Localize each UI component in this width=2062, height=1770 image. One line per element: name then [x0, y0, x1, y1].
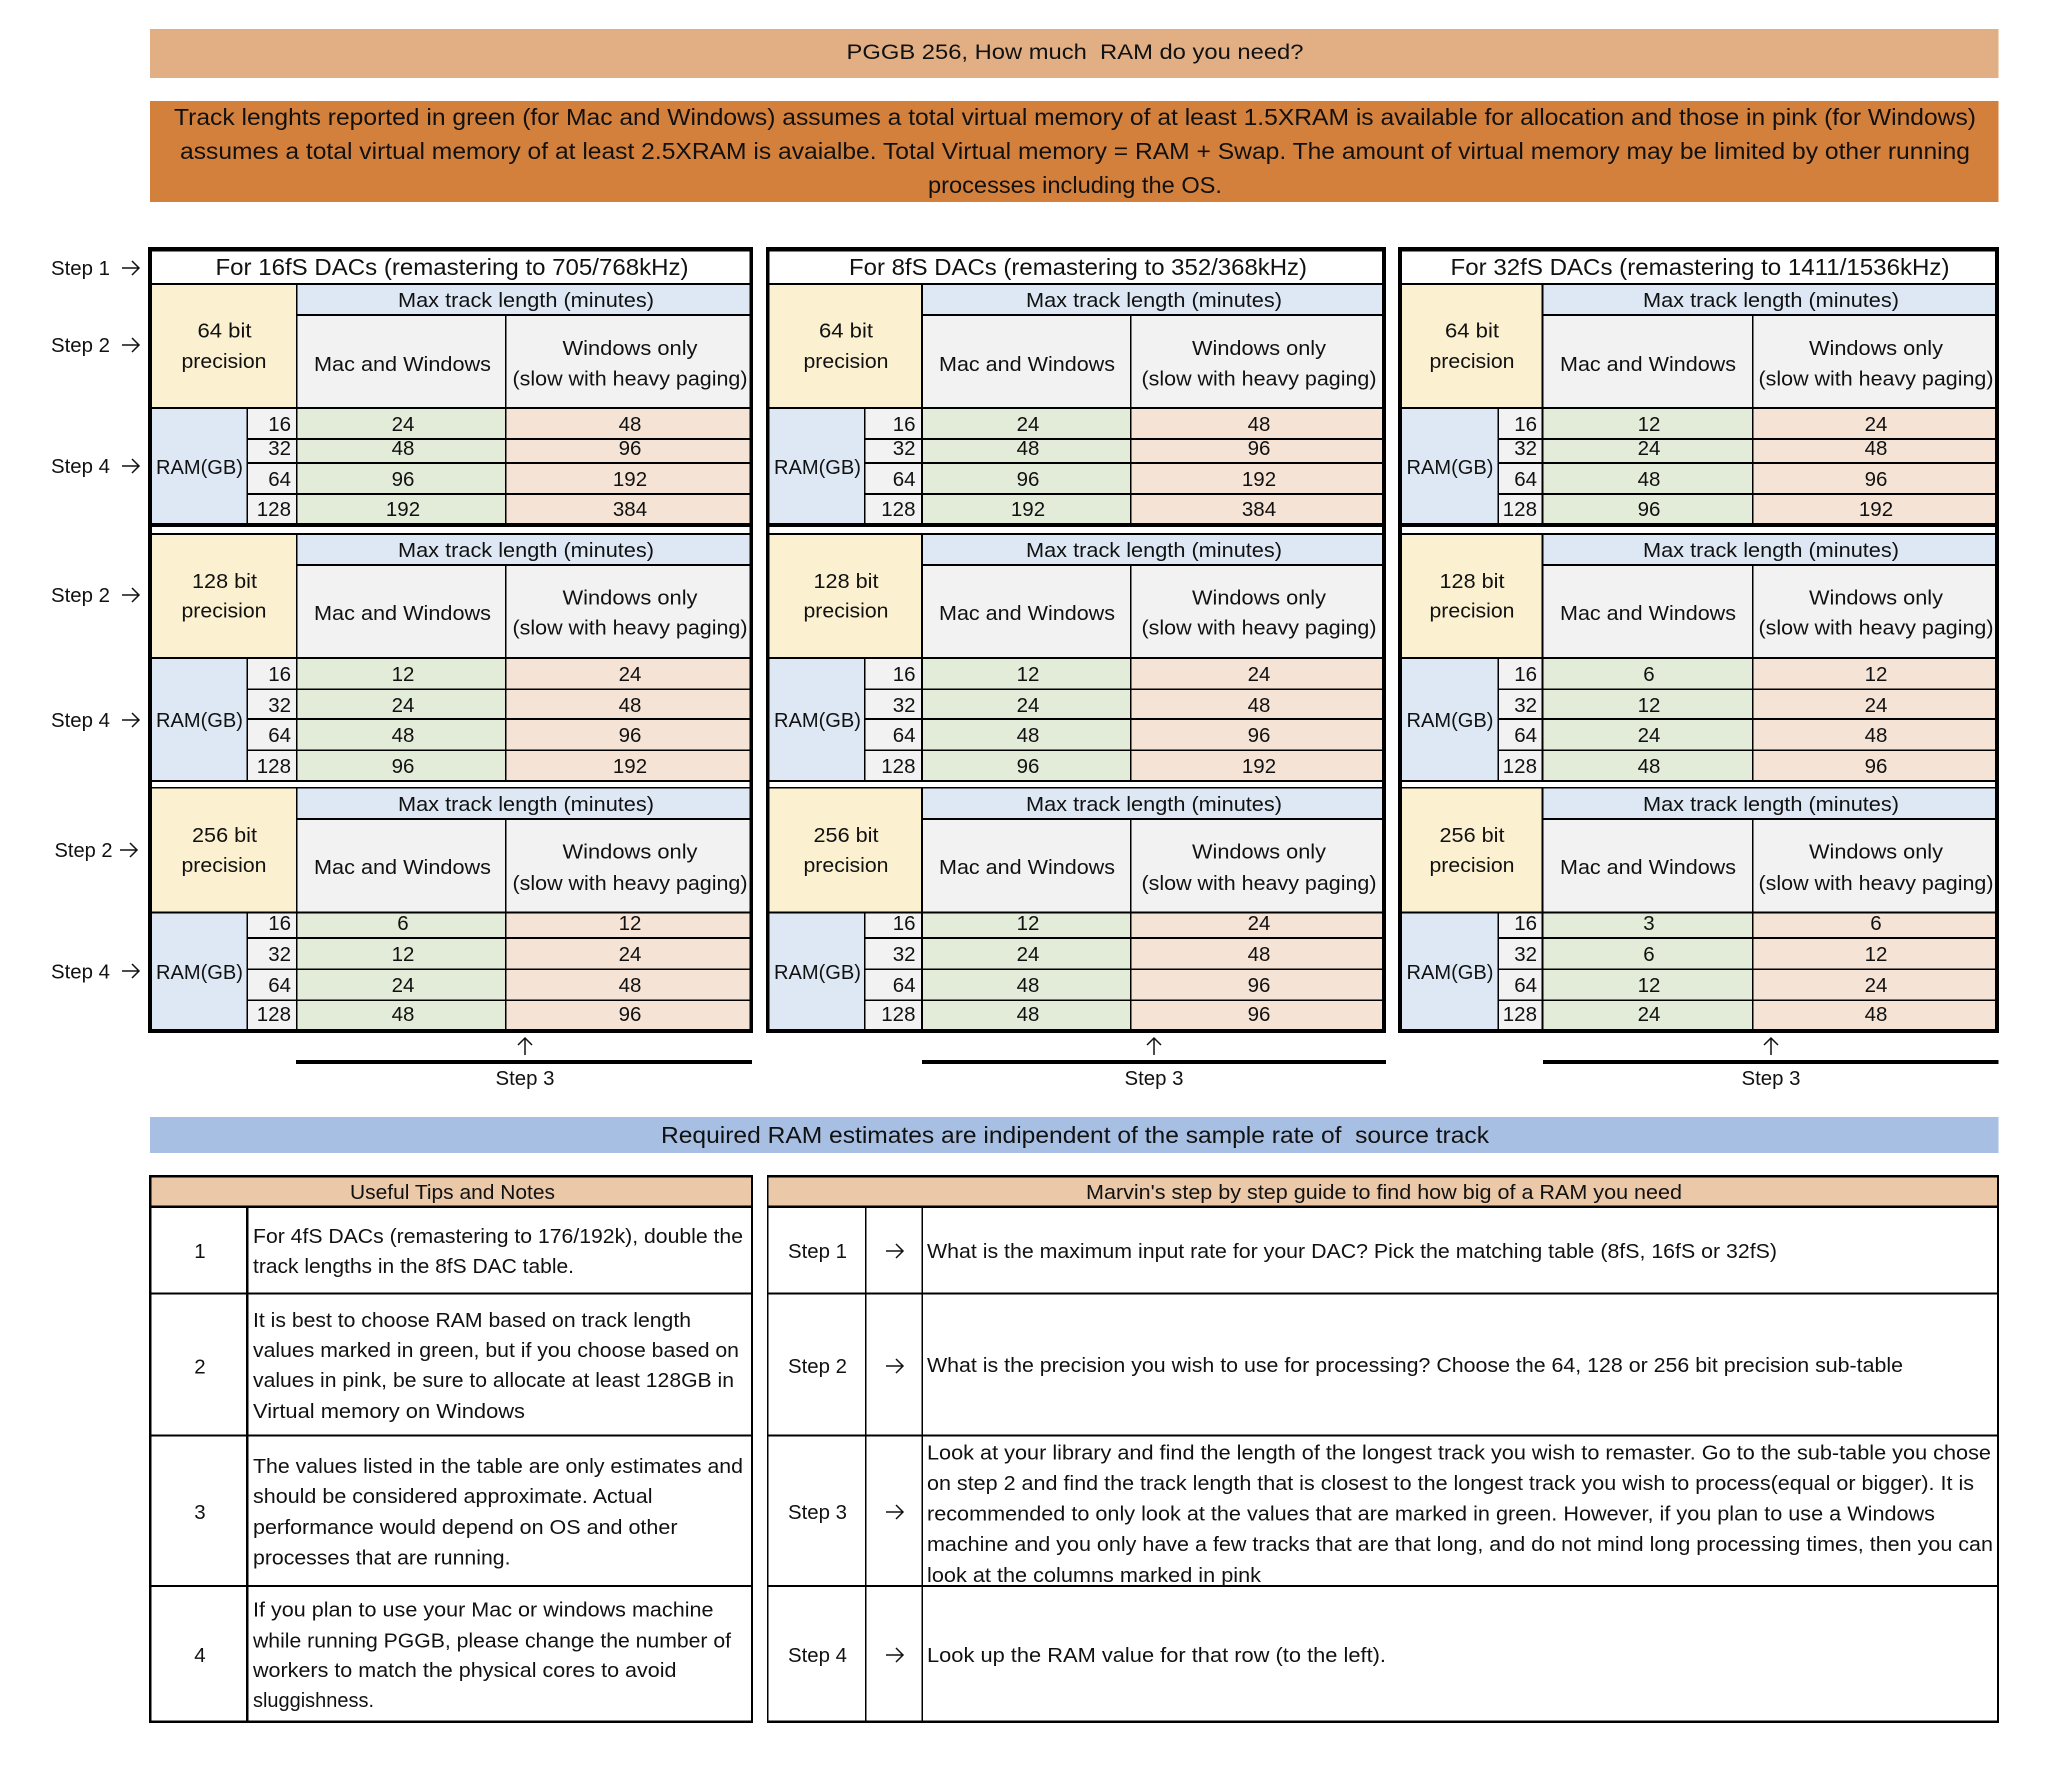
sub-table: 128 bit: 48	[619, 694, 641, 717]
sub-table: 128 bit: 16	[1514, 663, 1537, 686]
sub-table: 64 bit: 24	[1865, 413, 1887, 436]
sub-table: 128 bit: 32	[1514, 694, 1537, 717]
tip 1: track lengths in the 8fS DAC table.	[253, 1255, 574, 1278]
guide step 3: recommended to only look at the values that are marked in green. However, if you plan to use a Windows	[927, 1502, 1935, 1526]
sub-table: 256 bit: 24	[1638, 1003, 1660, 1026]
guide step 3	[768, 1436, 1997, 1587]
sub-table: 128 bit: 64	[268, 724, 291, 747]
sub-table: 128 bit: 24	[1638, 724, 1660, 747]
sub-table: 256 bit: 32	[893, 943, 916, 966]
sub-table: 128 bit: (slow with heavy paging)	[1142, 616, 1376, 640]
virtual memory note banner: assumes a total virtual memory of at least 2.5XRAM is avaialbe. Total Virtual memory = RAM + Swap. The amount of virtual memory may be limited by other running	[180, 138, 1970, 164]
sub-table: 64 bit: Max track length (minutes)	[398, 289, 654, 312]
sub-table: 256 bit: Max track length (minutes)	[398, 793, 654, 816]
sub-table: 128 bit: 16	[893, 663, 916, 686]
heading: 8fS: For 8fS DACs (remastering to 352/368kHz)	[849, 254, 1307, 280]
sub-table: 64 bit: (slow with heavy paging)	[512, 368, 748, 390]
step 3 marker: 8fS: Step 3	[1124, 1067, 1184, 1090]
sub-table: 64 bit: RAM(GB)	[774, 456, 861, 479]
sub-table: 256 bit: 12	[392, 943, 414, 966]
left step markers: Step 2	[54, 839, 112, 862]
sub-table: 256 bit: 6	[1643, 943, 1655, 966]
sub-table: 64 bit: precision	[1430, 350, 1514, 373]
sub-table: 128 bit: 128	[881, 755, 916, 778]
sub-table: 64 bit: 96	[619, 437, 641, 460]
panel: step by step guide	[767, 1175, 1999, 1723]
guide step 3: on step 2 and find the track length that is closest to the longest track you wish to process(equal or bigger). It is	[927, 1472, 1974, 1495]
sub-table: 256 bit: 256 bit	[192, 824, 257, 847]
sub-table: 256 bit: 96	[1248, 1003, 1270, 1026]
sub-table: 64 bit: 192	[1242, 468, 1276, 491]
sub-table: 64 bit: 64	[268, 468, 291, 491]
sub-table: 128 bit: Max track length (minutes)	[1026, 539, 1282, 562]
sub-table: 64 bit: 128	[1503, 498, 1537, 521]
sub-table: 64 bit: 48	[619, 413, 641, 436]
tip 2: Virtual memory on Windows	[253, 1400, 525, 1423]
tip 3: 3	[194, 1501, 206, 1524]
sub-table: 256 bit: 256 bit	[1440, 824, 1505, 847]
sub-table: 64 bit: Mac and Windows	[314, 353, 491, 376]
sub-table: 64 bit: RAM(GB)	[156, 456, 243, 479]
tip 4: sluggishness.	[253, 1689, 374, 1712]
sub-table: 256 bit: precision	[1430, 854, 1514, 877]
sub-table: 64 bit: precision	[182, 350, 266, 373]
sub-table: 128 bit: Max track length (minutes)	[398, 539, 654, 562]
sub-table: 256 bit: 96	[1248, 974, 1270, 997]
sub-table: 256 bit: 128	[881, 1003, 916, 1026]
left step markers: Step 4	[51, 960, 110, 984]
sub-table: 256 bit: 64	[893, 974, 916, 997]
sub-table: 64 bit: 64 bit	[198, 320, 252, 342]
sub-table: 64 bit: 24	[392, 413, 414, 436]
sub-table: 128 bit: 24	[619, 663, 641, 686]
sub-table: 256 bit: 48	[1017, 1003, 1039, 1026]
sub-table: 64 bit: 48	[392, 437, 414, 460]
panel: 8fS DAC table	[766, 247, 1386, 1033]
sub-table: 128 bit: 128 bit	[1440, 570, 1505, 593]
sub-table: 128 bit: 128	[257, 755, 291, 778]
panel: 32fS DAC table	[1398, 247, 1999, 1033]
heading: 16fS: For 16fS DACs (remastering to 705/768kHz)	[216, 254, 688, 280]
sub-table: 256 bit: 16	[893, 912, 916, 935]
guide step 4	[768, 1587, 1997, 1720]
sub-table: 256 bit: 128	[257, 1003, 291, 1026]
step 3 marker: 16fS	[296, 1038, 752, 1090]
tip 3: performance would depend on OS and other	[253, 1516, 678, 1539]
sub-table: 128 bit: precision	[182, 600, 266, 622]
sub-table: 128 bit: 48	[1638, 755, 1660, 778]
sub-table: 64 bit: 32	[268, 437, 291, 460]
tip 4: workers to match the physical cores to avoid	[252, 1659, 677, 1682]
sub-table: 128 bit: 12	[1865, 663, 1887, 686]
sub-table: 256 bit: 3	[1643, 912, 1655, 935]
sub-table: 64 bit: 24	[1017, 413, 1039, 436]
tip 3: The values listed in the table are only estimates and	[253, 1455, 743, 1478]
sub-table: 64 bit: Windows only	[1192, 337, 1327, 360]
sub-table: 256 bit: Mac and Windows	[939, 856, 1115, 879]
sub-table: 64 bit: 16	[893, 413, 916, 436]
sub-table: 128 bit: 24	[1865, 694, 1887, 717]
sub-table: 128 bit: 32	[268, 694, 291, 717]
sub-table: 128 bit: 12	[1638, 694, 1660, 717]
sub-table: 128 bit: 96	[1017, 755, 1039, 778]
step 3 marker: 32fS	[1543, 1038, 1998, 1090]
tip 2	[152, 1294, 751, 1434]
tip 3	[152, 1436, 751, 1585]
tip 4: If you plan to use your Mac or windows machine	[253, 1598, 714, 1622]
sub-table: 256 bit: 24	[392, 974, 414, 997]
sub-table: 256 bit: 6	[1870, 912, 1882, 935]
sub-table: 64 bit	[770, 285, 1382, 533]
sub-table: 128 bit: RAM(GB)	[774, 709, 861, 732]
sub-table: 256 bit: Max track length (minutes)	[1026, 793, 1282, 816]
sub-table: 256 bit: 16	[1514, 912, 1537, 935]
sub-table: 64 bit: 48	[1248, 413, 1270, 436]
sub-table: 256 bit	[1402, 788, 1995, 1029]
tip 4: while running PGGB, please change the number of	[252, 1630, 731, 1652]
tip 1	[152, 1208, 751, 1292]
sub-table: 128 bit	[1402, 535, 1995, 787]
sub-table: 128 bit: Max track length (minutes)	[1643, 539, 1899, 562]
sub-table: 64 bit: 192	[1859, 498, 1893, 521]
tip 1: For 4fS DACs (remastering to 176/192k), double the	[253, 1225, 743, 1248]
guide heading: Marvin's step by step guide to find how big of a RAM you need	[1086, 1181, 1682, 1204]
sub-table: 64 bit: 32	[1514, 437, 1537, 460]
sub-table: 128 bit: 96	[619, 724, 641, 747]
sub-table: 64 bit: Mac and Windows	[1560, 353, 1736, 376]
tip 4: 4	[194, 1644, 206, 1667]
sample rate note band: Required RAM estimates are indipendent of the sample rate of source track	[661, 1122, 1490, 1148]
sub-table: 64 bit: 64 bit	[1445, 320, 1499, 342]
sub-table: 64 bit: (slow with heavy paging)	[1142, 368, 1376, 390]
tips heading: Useful Tips and Notes	[350, 1181, 555, 1204]
sub-table: 256 bit: Windows only	[562, 840, 698, 864]
sub-table: 128 bit: 192	[613, 755, 647, 778]
virtual memory note banner: processes including the OS.	[928, 172, 1222, 198]
step 3 marker: 16fS: Step 3	[496, 1067, 554, 1090]
step 3 marker: 32fS: Step 3	[1742, 1067, 1800, 1090]
sub-table: 128 bit: Mac and Windows	[314, 602, 491, 625]
sub-table: 128 bit: (slow with heavy paging)	[512, 616, 748, 640]
sub-table: 256 bit: 64	[268, 974, 291, 997]
sub-table: 128 bit	[152, 535, 750, 787]
sub-table: 64 bit: 96	[1248, 437, 1270, 460]
left step markers: Step 2	[51, 584, 110, 607]
tip 2: values marked in green, but if you choose based on	[253, 1339, 739, 1362]
heading: 8fS	[770, 252, 1382, 283]
sub-table: 64 bit	[152, 285, 750, 533]
sub-table: 64 bit: 64	[1514, 468, 1537, 491]
heading: 16fS	[152, 252, 750, 283]
sub-table: 128 bit: 48	[392, 724, 414, 747]
guide step 2	[768, 1294, 1997, 1434]
sub-table: 64 bit: 12	[1638, 413, 1660, 436]
sub-table: 64 bit: (slow with heavy paging)	[1758, 368, 1994, 390]
heading: 32fS: For 32fS DACs (remastering to 1411/1536kHz)	[1450, 254, 1950, 280]
sub-table: 64 bit: 128	[881, 498, 916, 521]
sub-table: 64 bit: 96	[1638, 498, 1660, 521]
guide step 1: Step 1	[788, 1240, 847, 1263]
sub-table: 256 bit: (slow with heavy paging)	[1758, 872, 1994, 895]
sub-table: 64 bit: Max track length (minutes)	[1643, 289, 1899, 312]
sub-table: 64 bit: 48	[1638, 468, 1660, 491]
sub-table: 128 bit: Windows only	[562, 586, 698, 610]
sub-table: 128 bit: 16	[268, 663, 291, 686]
panel: 16fS DAC table	[148, 247, 753, 1033]
sub-table: 256 bit: 24	[1865, 974, 1887, 997]
sub-table: 128 bit: 24	[392, 694, 414, 717]
sub-table: 64 bit: 48	[1865, 437, 1887, 460]
sub-table: 256 bit: Max track length (minutes)	[1643, 793, 1899, 816]
sub-table: 128 bit: 128 bit	[814, 570, 879, 593]
sub-table: 128 bit: Mac and Windows	[939, 602, 1115, 625]
sub-table: 128 bit: 24	[1248, 663, 1270, 686]
sub-table: 256 bit: (slow with heavy paging)	[512, 872, 748, 895]
sub-table: 64 bit: RAM(GB)	[1406, 456, 1494, 479]
panel: useful tips and notes	[149, 1175, 753, 1723]
sub-table: 64 bit: 24	[1638, 437, 1660, 460]
sub-table: 256 bit: Mac and Windows	[314, 856, 491, 879]
sub-table: 256 bit: 12	[619, 912, 641, 935]
sub-table: 256 bit: 128	[1503, 1003, 1537, 1026]
tip 1: 1	[194, 1240, 206, 1263]
sub-table: 128 bit: 12	[392, 663, 414, 686]
sub-table: 128 bit: precision	[804, 600, 888, 622]
sub-table: 64 bit: 16	[1514, 413, 1537, 436]
guide step 3: machine and you only have a few tracks that are that long, and do not mind long processing times, then you can	[927, 1533, 1993, 1556]
tip 3: should be considered approximate. Actual	[253, 1485, 652, 1508]
tip 3: processes that are running.	[253, 1546, 510, 1570]
guide step 1: What is the maximum input rate for your DAC? Pick the matching table (8fS, 16fS or 32fS)	[927, 1240, 1777, 1263]
sub-table: 128 bit: 64	[1514, 724, 1537, 747]
sub-table: 128 bit: precision	[1430, 600, 1514, 622]
sub-table: 128 bit: RAM(GB)	[156, 709, 243, 732]
sub-table: 256 bit: 16	[268, 912, 291, 935]
sub-table: 64 bit: 48	[1017, 437, 1039, 460]
tips heading	[152, 1178, 751, 1206]
sub-table: 256 bit: 48	[1248, 943, 1270, 966]
sub-table: 128 bit: Mac and Windows	[1560, 602, 1736, 625]
sub-table: 256 bit: RAM(GB)	[156, 961, 243, 984]
sub-table: 64 bit: 96	[1017, 468, 1039, 491]
tip 2: It is best to choose RAM based on track length	[253, 1309, 691, 1332]
sub-table: 128 bit	[770, 535, 1382, 787]
sub-table: 256 bit	[770, 788, 1382, 1029]
sub-table: 64 bit: Windows only	[1809, 337, 1944, 360]
sub-table: 256 bit: RAM(GB)	[1406, 961, 1494, 984]
sub-table: 128 bit: (slow with heavy paging)	[1758, 616, 1994, 640]
sample rate note band	[150, 1117, 1998, 1153]
sub-table: 128 bit: 48	[1248, 694, 1270, 717]
sub-table: 256 bit: 12	[1865, 943, 1887, 966]
sub-table: 64 bit: 96	[1865, 468, 1887, 491]
sub-table: 128 bit: 128	[1503, 755, 1537, 778]
left step markers: Step 2	[51, 334, 110, 357]
sub-table: 128 bit: Windows only	[1192, 586, 1327, 610]
title banner: PGGB 256, How much RAM do you need?	[846, 40, 1304, 64]
guide step 3: Look at your library and find the length of the longest track you wish to remaster. Go to the sub-table you chose	[927, 1442, 1991, 1464]
sub-table: 64 bit: 128	[257, 498, 291, 521]
sub-table: 128 bit: 48	[1017, 724, 1039, 747]
sub-table: 64 bit: 16	[268, 413, 291, 436]
sub-table: 256 bit: 48	[1865, 1003, 1887, 1026]
sub-table: 256 bit: 12	[1638, 974, 1660, 997]
tip 2: values in pink, be sure to allocate at least 128GB in	[253, 1369, 734, 1392]
sub-table: 128 bit: 64	[893, 724, 916, 747]
sub-table: 256 bit: 96	[619, 1003, 641, 1026]
virtual memory note banner: Track lenghts reported in green (for Mac and Windows) assumes a total virtual memory of at least 1.5XRAM is available for allocation and those in pink (for Windows)	[174, 104, 1976, 130]
sub-table: 128 bit: 96	[1865, 755, 1887, 778]
sub-table: 64 bit: 64 bit	[819, 320, 873, 342]
tip 2: 2	[194, 1356, 206, 1378]
sub-table: 256 bit: Mac and Windows	[1560, 856, 1736, 879]
sub-table: 64 bit: 192	[386, 498, 420, 521]
sub-table: 256 bit: 64	[1514, 974, 1537, 997]
sub-table: 256 bit: 24	[1248, 912, 1270, 935]
sub-table: 128 bit: 96	[392, 755, 414, 778]
sub-table: 256 bit: Windows only	[1192, 840, 1327, 864]
sub-table: 256 bit: 6	[397, 912, 409, 935]
sub-table: 256 bit: 12	[1017, 912, 1039, 935]
guide step 2: What is the precision you wish to use for processing? Choose the 64, 128 or 256 bit precision sub-table	[927, 1354, 1903, 1377]
sub-table: 256 bit: 24	[619, 943, 641, 966]
sub-table: 64 bit: 192	[1011, 498, 1045, 521]
guide heading	[768, 1178, 1997, 1206]
sub-table: 64 bit: 32	[893, 437, 916, 460]
sub-table: 256 bit: 24	[1017, 943, 1039, 966]
step 3 marker: 8fS	[922, 1038, 1386, 1090]
sub-table: 128 bit: 12	[1017, 663, 1039, 686]
sub-table: 256 bit: 256 bit	[814, 824, 879, 847]
sub-table: 128 bit: Windows only	[1809, 586, 1944, 610]
left step markers: Step 1	[51, 257, 110, 280]
sub-table: 64 bit: 384	[1242, 498, 1276, 521]
sub-table: 64 bit: Max track length (minutes)	[1026, 289, 1282, 312]
sub-table: 256 bit: 48	[1017, 974, 1039, 997]
sub-table: 128 bit: 6	[1643, 663, 1655, 686]
sub-table: 128 bit: 192	[1242, 755, 1276, 778]
virtual memory note banner	[150, 101, 1998, 202]
sub-table: 128 bit: RAM(GB)	[1406, 709, 1494, 732]
sub-table: 256 bit: Windows only	[1809, 840, 1944, 864]
left step markers: Step 4	[51, 709, 110, 732]
sub-table: 256 bit: 48	[619, 974, 641, 997]
sub-table: 128 bit: 32	[893, 694, 916, 717]
sub-table: 256 bit: precision	[804, 854, 888, 877]
guide step 2: Step 2	[788, 1355, 847, 1378]
title banner	[150, 29, 1998, 78]
sub-table: 128 bit: 96	[1248, 724, 1270, 747]
sub-table: 256 bit: (slow with heavy paging)	[1142, 872, 1376, 895]
tip 4	[152, 1587, 751, 1720]
guide step 3: look at the columns marked in pink	[927, 1564, 1262, 1587]
sub-table: 128 bit: 48	[1865, 724, 1887, 747]
left step markers	[51, 257, 139, 984]
left step markers: Step 4	[51, 455, 110, 478]
sub-table: 64 bit: 384	[613, 498, 647, 521]
sub-table: 128 bit: 128 bit	[192, 570, 257, 593]
guide step 1	[768, 1208, 1997, 1292]
sub-table: 64 bit: 96	[392, 468, 414, 491]
sub-table: 64 bit: Windows only	[562, 337, 698, 360]
sub-table: 128 bit: 24	[1017, 694, 1039, 717]
sub-table: 256 bit: 32	[268, 943, 291, 966]
sub-table: 64 bit: Mac and Windows	[939, 353, 1115, 376]
guide step 4: Step 4	[788, 1644, 847, 1667]
sub-table: 256 bit: RAM(GB)	[774, 961, 861, 984]
sub-table: 64 bit: 64	[893, 468, 916, 491]
heading: 32fS	[1402, 252, 1995, 283]
sub-table: 256 bit: 48	[392, 1003, 414, 1026]
sub-table: 64 bit: precision	[804, 350, 888, 373]
sub-table: 64 bit: 192	[613, 468, 647, 491]
guide step 4: Look up the RAM value for that row (to the left).	[927, 1644, 1386, 1667]
sub-table: 256 bit	[152, 788, 750, 1029]
sub-table: 256 bit: 32	[1514, 943, 1537, 966]
guide step 3: Step 3	[788, 1501, 847, 1524]
sub-table: 64 bit	[1402, 285, 1995, 533]
sub-table: 256 bit: precision	[182, 854, 266, 877]
